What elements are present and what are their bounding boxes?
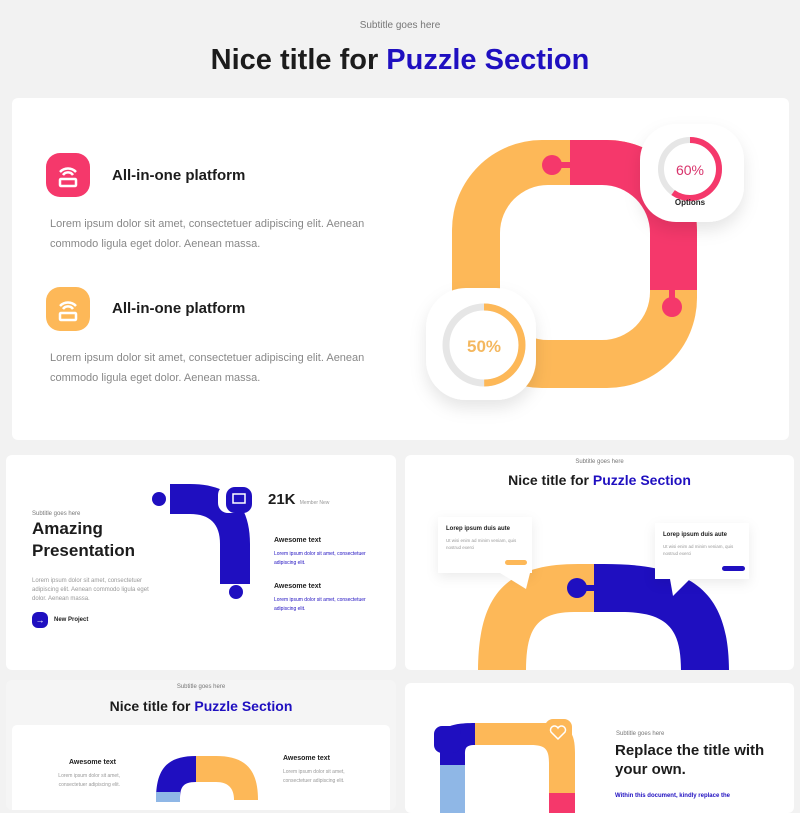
panel: amazing presentation: New Project [54,617,88,623]
panel: puzzle section 3: Awesome text [283,755,330,762]
panel: replace title: your own. [615,761,686,778]
panel: amazing presentation: Subtitle goes here [32,511,80,517]
text 2: Lorem ipsum dolor sit amet, consectetuer adipiscing elit. Aenean commodo ligula eget dolor. Aenean massa. [50,352,364,384]
panel: puzzle section 3: Awesome text [69,759,116,766]
panel: puzzle section 2: Nice title for Puzzle Section [508,472,691,488]
panel: puzzle section 2: Ut wisi enim ad minim veniam, quis [663,544,733,549]
heading [32,519,135,560]
panel: puzzle section 2: nostrud exerci [446,545,474,550]
text 1: Lorem ipsum dolor sit amet, consectetuer adipiscing elit. Aenean commodo ligula eget dolor. Aenean massa. [50,218,364,250]
panel: puzzle section 3: Subtitle goes here [177,684,225,690]
panel: replace title [405,683,794,813]
panel: amazing presentation: Awesome text [274,537,321,544]
subtitle: Subtitle goes here [360,20,440,31]
panel: puzzle section 2: Ut wisi enim ad minim veniam, quis [446,538,516,543]
puzzle ring chart: 50% [467,337,501,356]
panel: puzzle section 3 [6,680,396,810]
panel: puzzle section 2: Subtitle goes here [575,459,624,465]
button [32,612,48,628]
panel: puzzle section 2: Lorep ipsum duis aute [446,526,510,532]
puzzle ring chart: 60% [676,162,704,178]
panel: amazing presentation: Lorem ipsum dolor sit amet, consectetuer [274,551,366,557]
badge 60% [640,124,744,222]
heading: Presentation [32,541,135,560]
puzzle ring chart [422,137,748,412]
title: Nice title for Puzzle Section [211,44,589,76]
panel: puzzle section 3: Lorem ipsum dolor sit amet, consectetuer adipiscing elit. [58,773,120,788]
panel: amazing presentation: adipiscing elit. [274,560,305,566]
panel: puzzle section 2: Lorep ipsum duis aute [663,532,727,538]
heading: Amazing [32,519,103,538]
panel: replace title: Within this document, kindly replace the [615,793,730,799]
panel: puzzle section 2: nostrud exerci [663,551,691,556]
panel: amazing presentation [6,455,396,670]
blue puzzle piece [152,484,252,599]
knobs [542,155,562,175]
icon: pink platform [46,153,90,197]
heading 2: All-in-one platform [112,300,245,317]
puzzle ring chart: Options [675,198,706,207]
panel: puzzle section 2 [405,455,794,670]
panel: replace title: Subtitle goes here [616,731,664,737]
panel: amazing presentation: Awesome text [274,583,321,590]
panel: puzzle section 3: Lorem ipsum dolor sit amet, consectetuer adipiscing elit. [283,769,345,784]
panel: replace title: Replace the title with [615,742,764,759]
badge 50% [426,288,536,400]
panel: puzzle section 3: Nice title for Puzzle Section [110,698,292,714]
panel: amazing presentation: Lorem ipsum dolor sit amet, consectetuer adipiscing elit. Aenean commodo ligula eget dolor. Aenean massa. [32,578,149,602]
heading 1: All-in-one platform [112,167,245,184]
panel: main [12,98,789,440]
button: → [36,615,44,625]
panel: amazing presentation: 21K Member New [268,491,329,508]
panel: amazing presentation: Lorem ipsum dolor sit amet, consectetuer [274,597,366,603]
panel: amazing presentation: adipiscing elit. [274,606,305,612]
icon: yellow platform [46,287,90,331]
